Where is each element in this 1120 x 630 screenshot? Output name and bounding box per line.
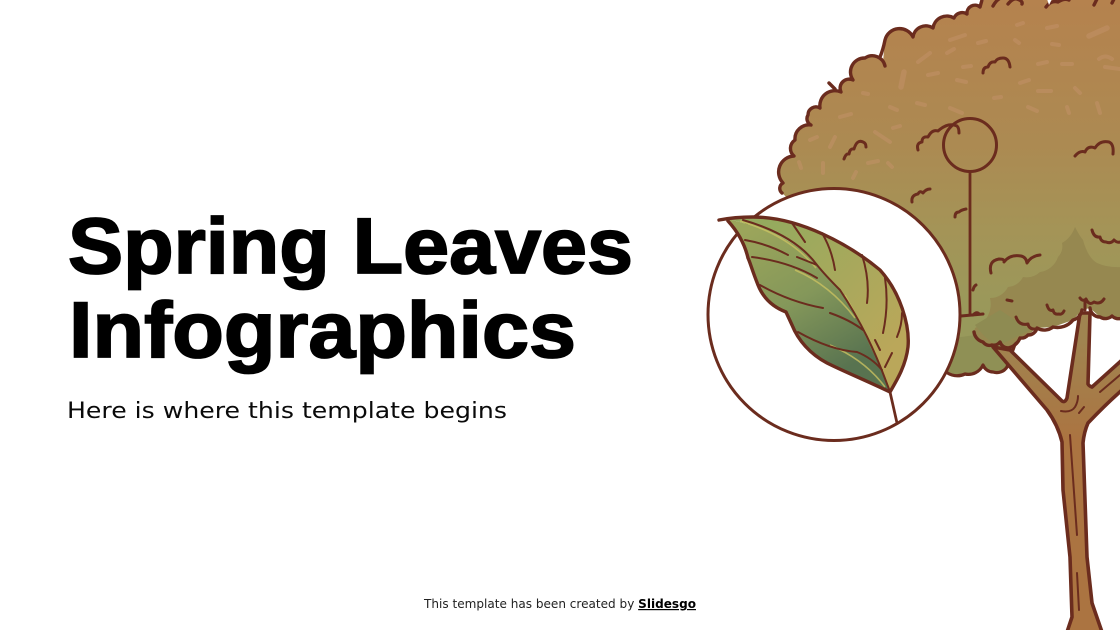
magnifier stem circle	[944, 118, 996, 315]
leaf stem	[890, 392, 897, 423]
front layer lower tint	[975, 310, 1030, 345]
leaf veins	[743, 220, 902, 392]
leaf	[719, 217, 908, 423]
crown curls	[844, 58, 1120, 316]
canopy back blob	[945, 330, 1020, 376]
tree	[779, 0, 1120, 630]
trunk bark lines	[1061, 375, 1120, 610]
title	[68, 201, 633, 374]
leaf lower half	[728, 219, 890, 392]
canopy crown	[779, 0, 1120, 340]
magnifier lens	[708, 188, 960, 440]
leaf highlights	[740, 221, 888, 387]
title: Spring Leaves	[68, 201, 633, 290]
leaf outline	[719, 217, 908, 392]
crown top notch	[1047, 0, 1052, 5]
footer credit: This template has been created by Slidesgo	[423, 597, 696, 611]
leaf upper half	[728, 217, 908, 392]
title: Infographics	[69, 285, 576, 374]
subtitle: Here is where this template begins	[67, 399, 507, 424]
canopy front layer	[974, 227, 1120, 348]
crown leaf flecks	[799, 23, 1120, 178]
trunk and branches	[993, 313, 1120, 630]
